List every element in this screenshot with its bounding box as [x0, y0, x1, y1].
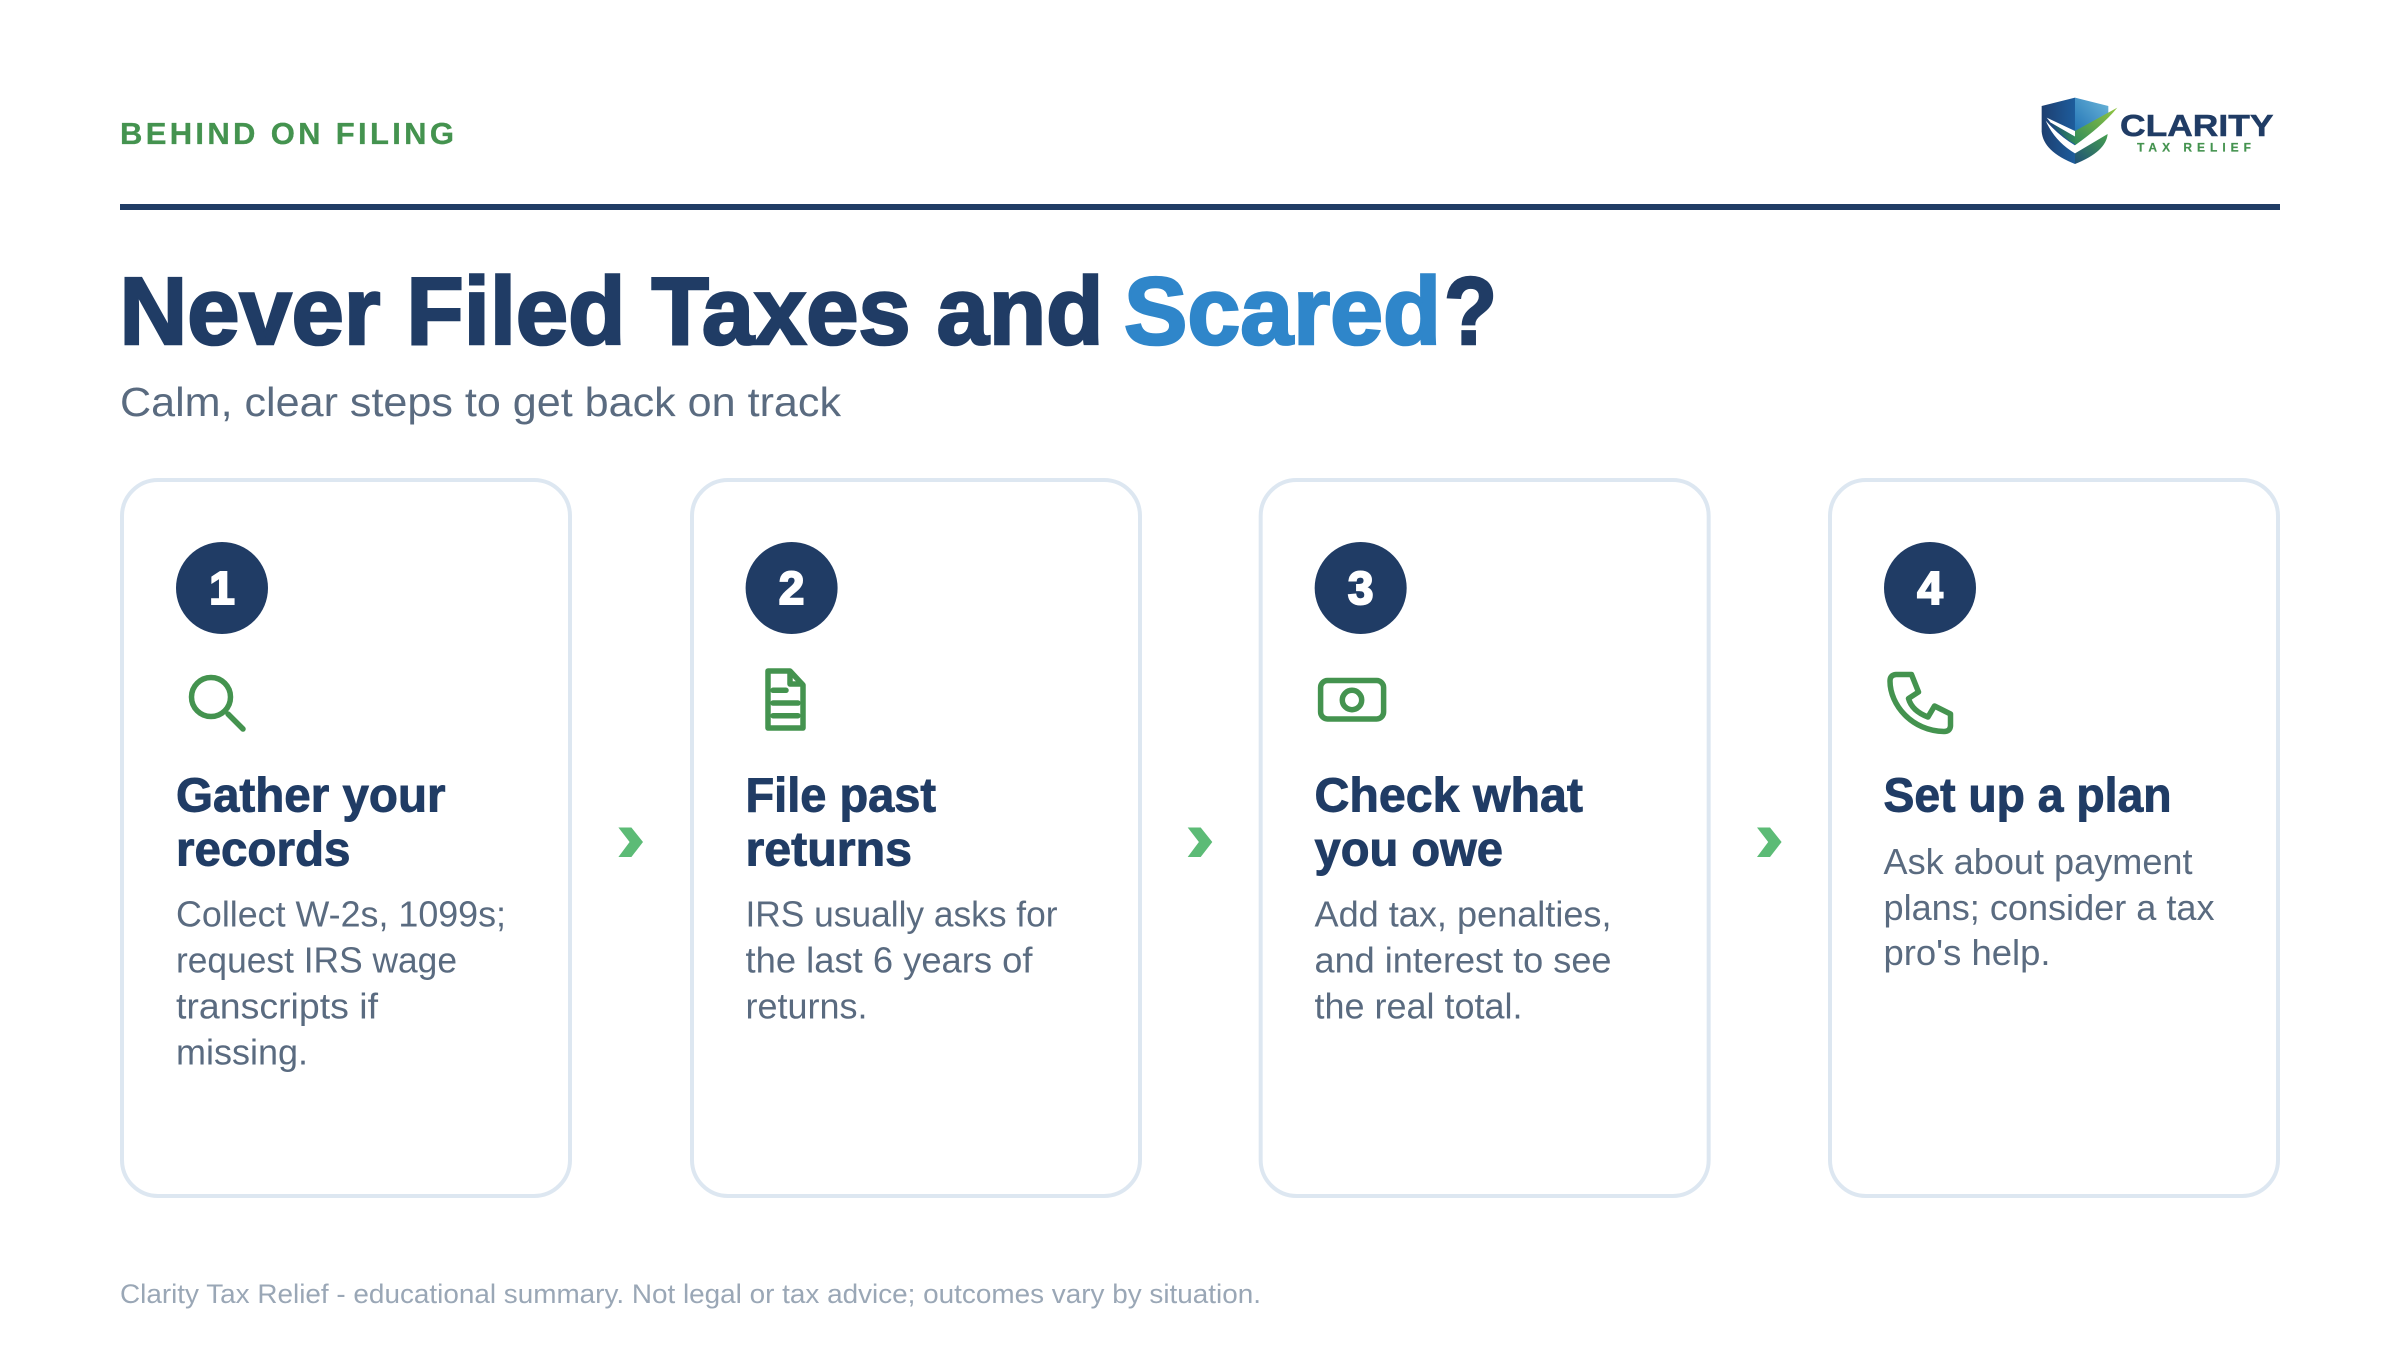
step 4 description	[1884, 841, 2214, 973]
title: Scared	[1124, 258, 1441, 365]
step 3 heading: you owe	[1314, 824, 1503, 877]
logo: Clarity Tax Relief	[2042, 98, 2274, 164]
subtitle: Calm, clear steps to get back on track	[120, 379, 842, 425]
icon: phone handset	[1890, 674, 1950, 732]
step 1 description: missing.	[176, 1032, 308, 1073]
title: Never Filed Taxes and	[120, 258, 1104, 365]
arrow: step 2 to 3	[1188, 828, 1212, 857]
step 2 heading: returns	[746, 824, 912, 877]
step 4 heading: Set up a plan	[1884, 770, 2172, 823]
arrow: step 1 to 2	[618, 828, 643, 857]
step 2 description: the last 6 years of	[746, 940, 1034, 981]
step 2 description: returns.	[746, 986, 868, 1027]
step number 1: 1	[209, 562, 235, 614]
step 3 description	[1314, 894, 1612, 1027]
step 1 description	[176, 894, 506, 1073]
step 2 heading	[746, 770, 936, 877]
logo wordmark: CLARITY	[2120, 109, 2274, 143]
logo tagline: TAX RELIEF	[2137, 141, 2251, 155]
step 1 heading	[176, 770, 446, 877]
title: ?	[1444, 258, 1497, 365]
icon: document	[768, 671, 803, 728]
step 3 description: the real total.	[1314, 986, 1522, 1027]
panel: step 1 gather your records	[122, 480, 570, 1196]
step 1 description: transcripts if	[176, 986, 379, 1027]
step 2 description: IRS usually asks for	[746, 894, 1058, 935]
step 3 heading	[1314, 770, 1583, 877]
step 4 description: Ask about payment	[1884, 841, 2192, 882]
step 2 description	[746, 894, 1058, 1027]
step 2 heading: File past	[746, 770, 936, 823]
step number 1	[176, 542, 268, 634]
panel: step 3 check what you owe	[1261, 480, 1709, 1196]
step 1 description: Collect W-2s, 1099s;	[176, 894, 506, 935]
eyebrow label: BEHIND ON FILING	[120, 116, 454, 151]
icon: banknote	[1321, 680, 1384, 719]
step 4 description: pro's help.	[1884, 932, 2050, 973]
step number 2: 2	[779, 562, 804, 614]
step number 2	[746, 542, 838, 634]
step 1 description: request IRS wage	[176, 940, 457, 981]
panel: step 4 set up a plan	[1830, 480, 2278, 1196]
step 1 heading: records	[176, 824, 350, 877]
step number 4: 4	[1917, 562, 1943, 614]
footer disclaimer: Clarity Tax Relief - educational summary. Not legal or tax advice; outcomes vary by situation.	[120, 1279, 1261, 1309]
step 3 heading: Check what	[1314, 770, 1583, 823]
step number 4	[1884, 542, 1976, 634]
arrow: step 3 to 4	[1757, 828, 1782, 857]
step 4 description: plans; consider a tax	[1884, 887, 2214, 928]
step 3 description: and interest to see	[1314, 940, 1612, 981]
icon: magnifying glass	[192, 678, 243, 729]
step 1 heading: Gather your	[176, 770, 446, 823]
icon: shield mark	[2042, 98, 2117, 164]
step number 3	[1315, 542, 1407, 634]
step number 3: 3	[1348, 562, 1373, 614]
panel: step 2 file past returns	[692, 480, 1140, 1196]
step 3 description: Add tax, penalties,	[1314, 894, 1612, 935]
